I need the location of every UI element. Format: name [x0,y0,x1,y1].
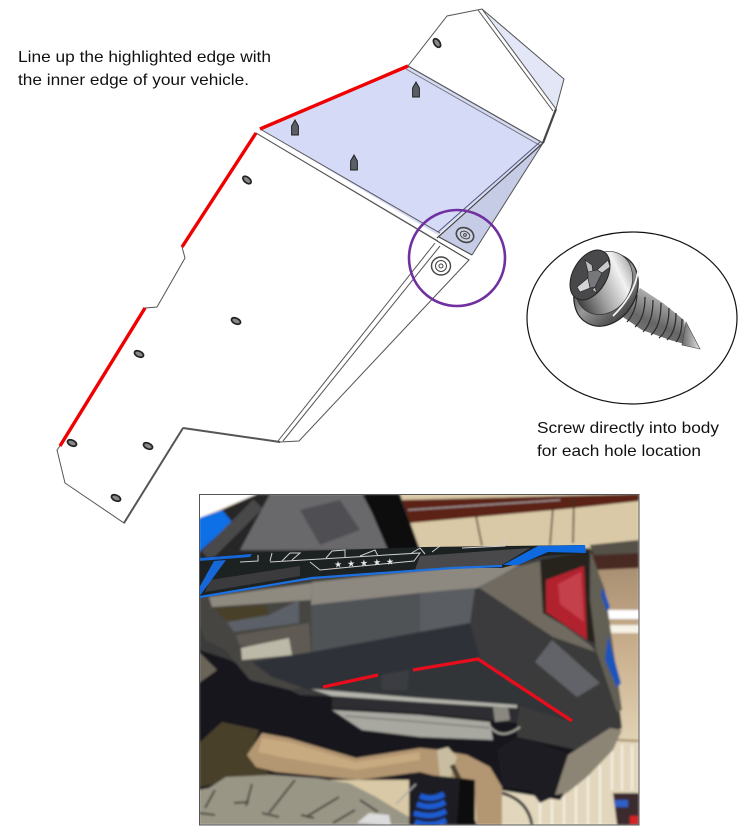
diagonal dark face [473,590,547,687]
callout circle: purple highlight [409,210,505,306]
callout circle: screw detail [527,232,737,404]
left lower chip [199,652,217,683]
decal base [199,545,585,597]
panel: pale blue top flap [484,10,564,109]
upper trim centre [311,565,520,605]
tire hub [357,813,391,825]
panel outline [57,9,564,523]
blue edge [601,587,610,612]
inset lower face [252,623,480,690]
screw cross recess [577,260,610,293]
blue frame [199,510,232,552]
grey cover [240,494,392,550]
silver bar [241,638,292,660]
highlighted red edges [60,66,408,446]
wall brown strip [617,740,639,741]
decal band [199,540,586,597]
skirt [555,728,622,795]
caption: screw directions: for each hole location [537,443,701,460]
wire [396,784,416,804]
recess brown [214,605,269,622]
plate upper shadow [332,698,520,723]
wall lights [608,610,639,619]
exhaust straight [247,733,502,825]
clip [493,707,510,722]
caption: screw directions [537,420,719,460]
light patch [535,640,600,697]
decal left blue [199,560,226,597]
inset upper face [310,594,420,652]
instruction text: line up edge [18,49,271,89]
decal stars: ★★★★★ [334,557,394,571]
side beams [590,546,638,571]
screw dome [564,241,644,325]
ceiling beam [402,494,639,523]
panel line drawing [57,9,564,523]
recess lower [236,623,311,655]
screw face [562,243,618,307]
upper trim left [209,583,312,607]
panel: thick lower edges [124,428,280,523]
roll bar [206,504,258,556]
decal outlined lettering [240,540,505,570]
right wall [596,566,638,740]
brown left area [199,722,271,787]
pipe clamp [437,747,457,780]
lower body below red line [336,661,564,718]
photo frame [200,494,639,825]
silver plate [332,710,493,740]
body base [199,548,622,750]
fasteners: upright [292,82,419,170]
panel: light blue main face [260,66,543,235]
peg board [613,793,639,825]
wheel arc [502,793,532,825]
white corner [199,494,257,518]
fold lines [256,9,556,441]
tail light [546,566,587,640]
icon: screw [561,241,700,349]
decal dotted area [415,548,530,570]
trim edge [311,689,517,708]
screw washer rim highlight [613,262,639,316]
wall base [199,494,639,825]
screw shank [620,288,688,345]
black shock tube [457,778,475,825]
photo scene [199,494,639,825]
screw head washers [432,225,476,275]
fasteners: tilted [66,37,442,503]
instruction text: line up edge: the inner edge of your vehicle. [18,72,249,89]
lower striped wall [500,740,639,825]
under tab [381,670,409,690]
screw tip [682,322,700,349]
screw threads [627,295,682,342]
recess grey [227,600,299,632]
body left column [199,583,312,690]
body right edge [590,550,622,712]
black gap [365,495,418,548]
panel: darker blue gusset [439,143,543,255]
tail light housing [540,550,598,645]
red highlight lines on vehicle [323,659,572,721]
blue spring [414,794,446,825]
decal blue swoosh [503,545,586,565]
instruction text: line up edge: Line up the highlighted edge with [18,49,271,66]
underbody black [200,648,577,802]
decal blue stripe [200,566,502,597]
engine dark block [534,794,550,804]
trim right band [478,560,596,652]
caption: screw directions: Screw directly into body [537,420,719,437]
tire [199,775,409,825]
screw washer [561,242,651,338]
upper dark area [200,495,418,558]
dark suspension [409,773,477,825]
photo: rear of vehicle [199,494,639,825]
